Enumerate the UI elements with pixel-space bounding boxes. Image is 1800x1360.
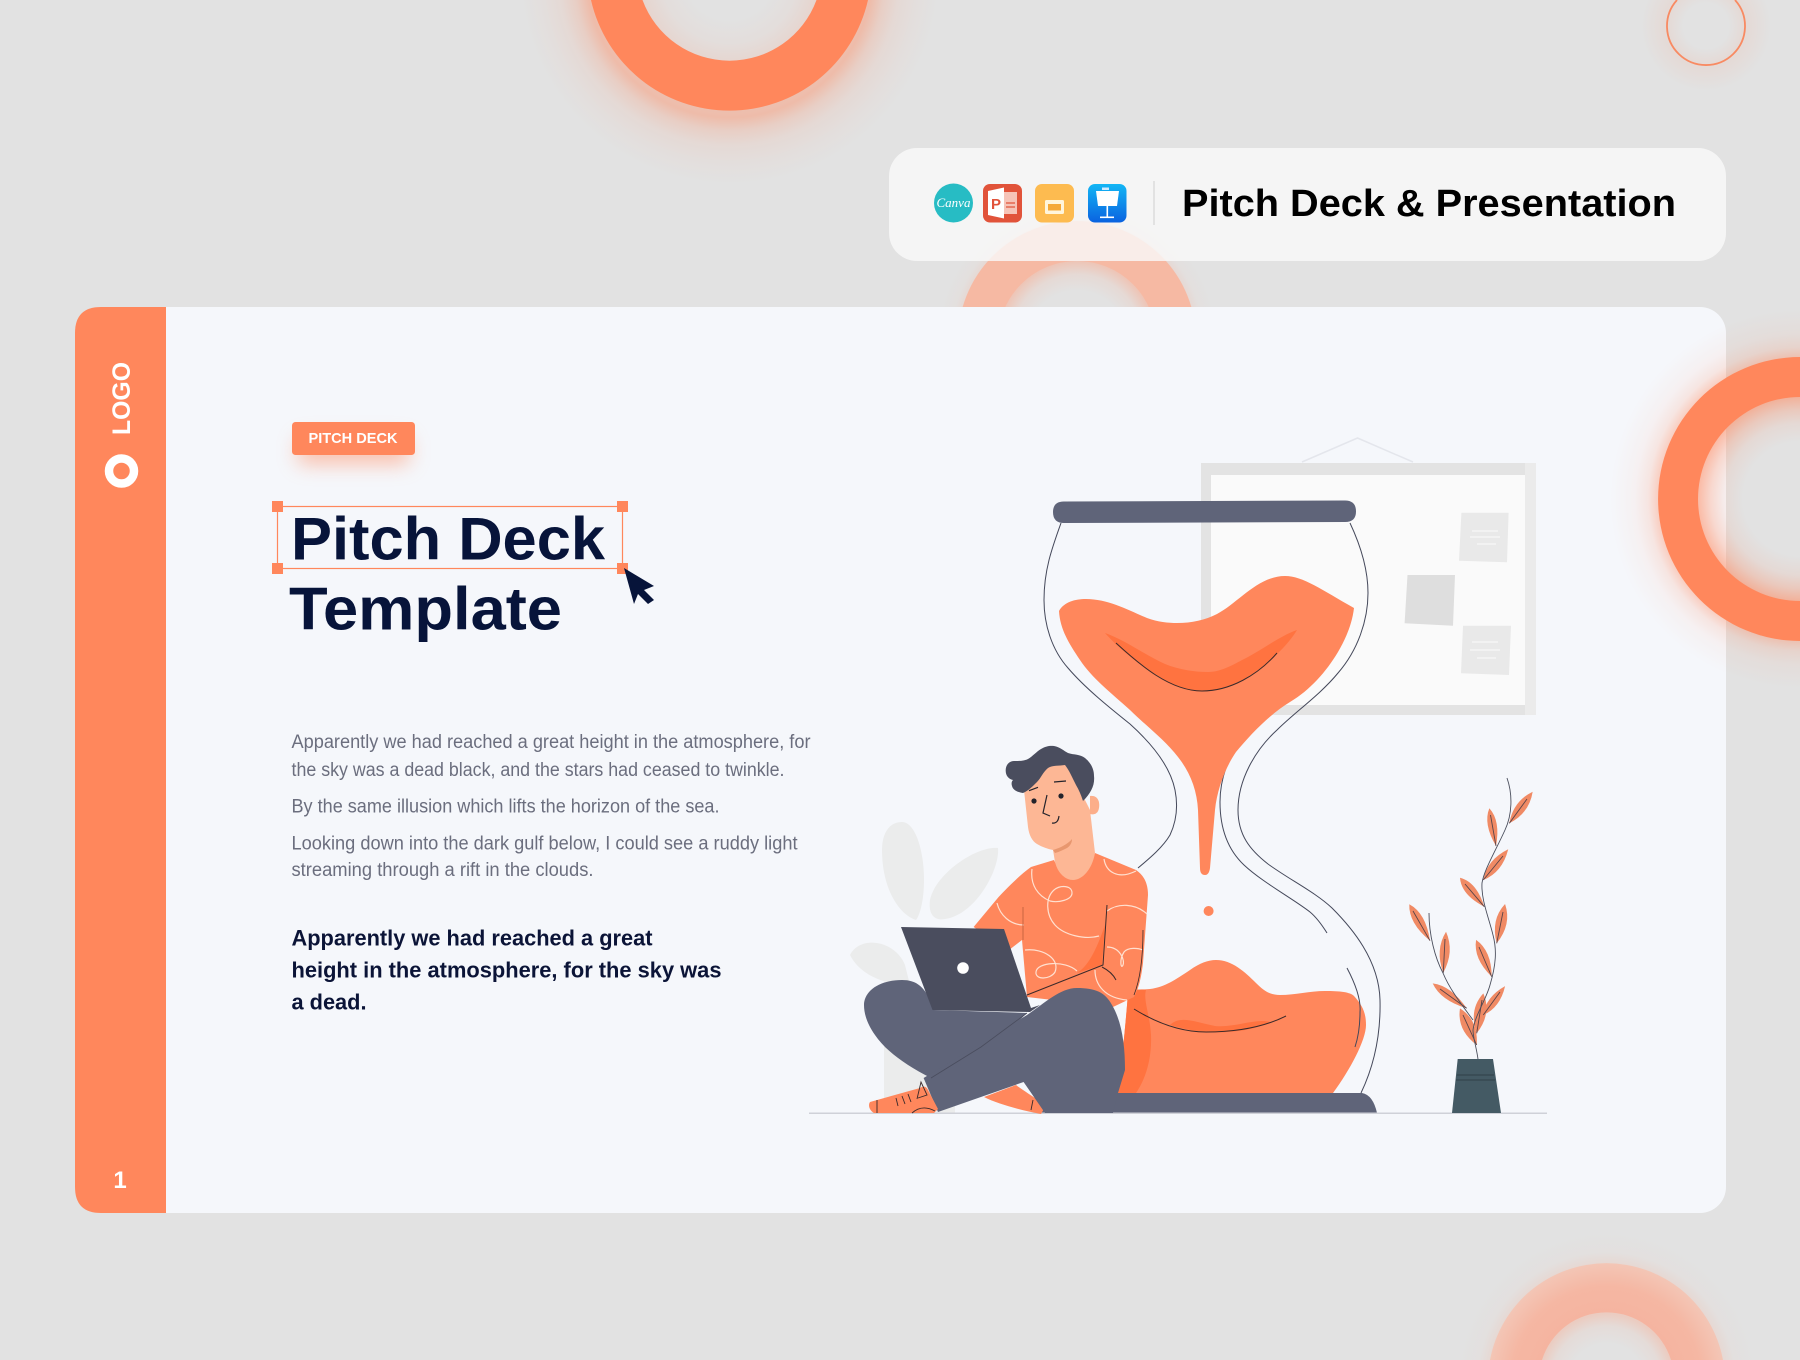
front leg: [924, 988, 1125, 1113]
decorative ring: right edge: [1610, 309, 1800, 689]
icon: Google Slides: [1035, 184, 1074, 222]
decorative ring: bottom right: [1456, 1232, 1756, 1360]
icon: PowerPoint: P: [991, 196, 1001, 213]
header pill: [889, 148, 1726, 261]
bold callout text: Apparently we had reached a great: [292, 926, 653, 950]
bold callout text: height in the atmosphere, for the sky was: [292, 958, 722, 982]
title: [289, 506, 606, 642]
icon: cursor arrow: [624, 568, 654, 604]
badge: PITCH DECK: [308, 430, 398, 447]
ear: [1090, 796, 1099, 814]
icon: Canva: Canva: [937, 195, 971, 210]
logo ring: [109, 458, 134, 484]
body text: the sky was a dead black, and the stars had ceased to twinkle.: [292, 760, 784, 781]
wall board: [1201, 438, 1536, 715]
icon: PowerPoint: [983, 184, 1022, 222]
selection box: [272, 501, 628, 574]
person: [864, 746, 1148, 1114]
title: Template: [289, 576, 562, 642]
face details: [1029, 781, 1066, 823]
icon: Keynote: [1088, 184, 1126, 222]
illustration: hourglass scene: [809, 438, 1547, 1114]
body text: [292, 732, 811, 881]
background plant: [850, 822, 998, 1113]
body text: Looking down into the dark gulf below, I could see a ruddy light: [292, 834, 798, 854]
plant in pot: [1405, 778, 1537, 1113]
page number: 1: [113, 1167, 127, 1194]
body text: By the same illusion which lifts the horizon of the sea.: [292, 796, 720, 818]
divider: [1154, 181, 1155, 225]
badge: [292, 422, 415, 464]
icon: Canva: [934, 184, 973, 222]
body text: streaming through a rift in the clouds.: [292, 860, 594, 881]
back leg: [864, 980, 1027, 1078]
decorative thin ring: top right: [1641, 0, 1771, 91]
body text: Apparently we had reached a great height in the atmosphere, for: [292, 732, 811, 753]
right shoe: [984, 1085, 1045, 1114]
falling grain: [1204, 906, 1214, 916]
glass outline: [1044, 523, 1380, 1093]
top sand: [1059, 576, 1354, 875]
leg crease: [931, 1013, 1027, 1078]
neck shadow: [1053, 839, 1072, 853]
laptop: [901, 927, 1040, 1012]
slide card: [75, 307, 1726, 1213]
hair: [1006, 746, 1094, 801]
ground line: [809, 1112, 1547, 1114]
decorative ring: behind header pill: [937, 200, 1217, 439]
sweater: [974, 853, 1148, 1007]
bottom sand: [1118, 960, 1366, 1093]
title: Pitch Deck: [291, 506, 606, 572]
sidebar: [75, 307, 166, 1213]
bold callout text: a dead.: [292, 990, 366, 1014]
decorative ring: top centre: [520, 0, 940, 185]
left shoe: [869, 1082, 938, 1113]
neck and head: [1024, 760, 1095, 880]
sweater squiggles: [997, 859, 1147, 1000]
header title: Pitch Deck & Presentation: [1182, 183, 1676, 225]
hourglass base: [1041, 1093, 1377, 1113]
logo text: LOGO: [108, 362, 136, 435]
hourglass top cap: [1053, 500, 1356, 523]
sleeve shading and lines: [1077, 925, 1105, 973]
bold callout text: [292, 926, 722, 1014]
